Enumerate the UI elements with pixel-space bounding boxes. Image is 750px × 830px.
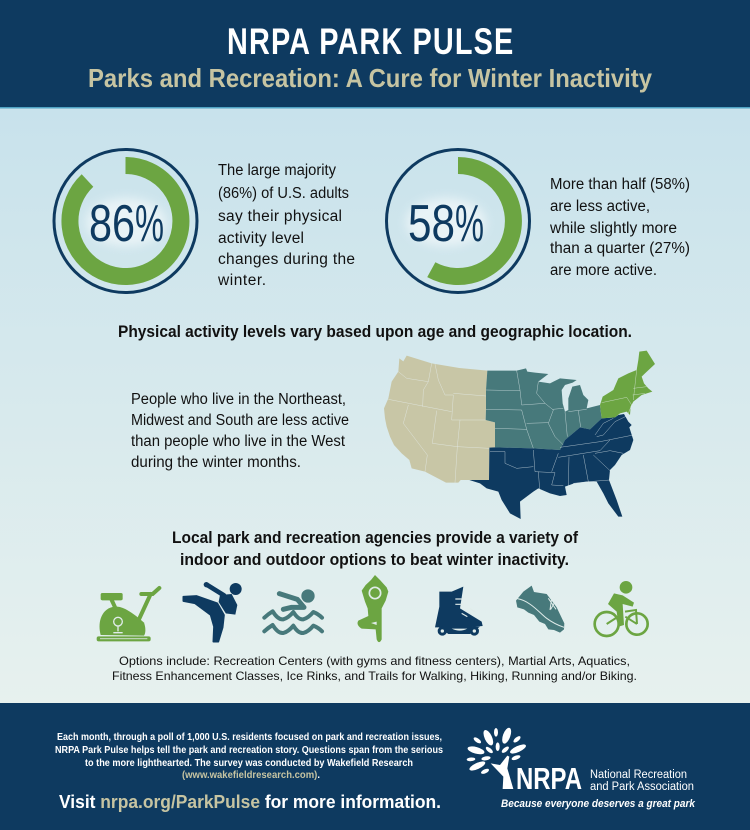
text: about the poll: Each month, through a poll of 1,000 U.S. residents focused on park and recreation issues, (57, 731, 442, 743)
text: 86% statement: activity level (218, 230, 304, 247)
text: 86% statement: (86%) of U.S. adults (218, 185, 349, 202)
heading: local agencies: indoor and outdoor options to beat winter inactivity. (180, 551, 569, 569)
logo: tree (467, 727, 527, 789)
logo: NRPA (467, 727, 696, 810)
icon: swimmer and waves (264, 589, 322, 633)
text: 58% statement: More than half (58%) (550, 176, 690, 193)
text: 86% statement: winter. (217, 272, 266, 289)
logo: tagline: Because everyone deserves a great park (501, 798, 696, 810)
heading: local agencies (172, 529, 578, 569)
map: United States by region (384, 351, 655, 519)
heading: activity levels: Physical activity levels vary based upon age and geographic location. (118, 323, 632, 341)
text: regional differences (131, 391, 349, 471)
text: 58% statement (549, 176, 690, 279)
text: 86% statement (217, 162, 355, 289)
text: options list (112, 654, 637, 683)
donut chart: 58%: % (455, 195, 484, 253)
map region: Midwest (486, 368, 602, 450)
text: regional differences: than people who live in the West (131, 433, 346, 450)
text: 86% statement: say their physical (218, 208, 342, 225)
text: regional differences: Midwest and South are less active (131, 412, 349, 429)
text: about the poll: (www.wakefieldresearch.com). (182, 769, 320, 781)
icon: running shoe (516, 586, 564, 633)
map region: South (469, 414, 633, 519)
text: options list: Options include: Recreation Centers (with gyms and fitness centers), Martial Arts, Aquatics, (119, 654, 630, 668)
donut chart: 86%: % (135, 195, 164, 253)
donut chart: 58%: 58 (408, 195, 455, 253)
text: options list: Fitness Enhancement Classes, Ice Rinks, and Trails for Walking, Hiking, Running and/or Biking. (112, 669, 637, 683)
text: 86% statement: The large majority (218, 162, 336, 179)
icon: martial arts (183, 582, 242, 642)
logo: organization name: National Recreation (590, 769, 687, 781)
text: 58% statement: while slightly more (549, 220, 677, 237)
call to action: Visit nrpa.org/ParkPulse for more information. (59, 791, 441, 812)
map region: West (384, 356, 495, 483)
icon: inline skate (435, 587, 483, 636)
title: NRPA PARK PULSE (227, 22, 513, 63)
text: about the poll: NRPA Park Pulse helps tell the park and recreation story. Questions span from the serious (55, 744, 443, 756)
text: regional differences: during the winter months. (131, 454, 301, 471)
text: 58% statement: are less active, (550, 198, 650, 215)
subtitle: Parks and Recreation: A Cure for Winter Inactivity (88, 63, 652, 93)
logo: organization name (590, 769, 694, 793)
text: 86% statement: changes during the (218, 251, 355, 268)
text: about the poll: to the more lighthearted. The survey was conducted by Wakefield Research (85, 757, 413, 769)
text: 58% statement: are more active. (550, 262, 657, 279)
footer band (0, 703, 750, 830)
map region: Northeast (600, 351, 655, 418)
heading: local agencies: Local park and recreation agencies provide a variety of (172, 529, 578, 547)
text: 58% statement: than a quarter (27%) (550, 240, 690, 257)
text: regional differences: People who live in the Northeast, (131, 391, 346, 408)
donut chart: 86%: 86 (89, 195, 135, 253)
icon: yoga tree pose (358, 575, 388, 642)
icon: cyclist (595, 581, 648, 636)
icon: exercise bike (97, 588, 159, 641)
logo: organization name: and Park Association (590, 781, 694, 793)
donut chart: 58% (386, 150, 530, 292)
donut chart: 86% (54, 150, 197, 292)
text: about the poll (55, 731, 443, 781)
logo: NRPA wordmark: NRPA (516, 761, 582, 796)
header band (0, 0, 750, 108)
